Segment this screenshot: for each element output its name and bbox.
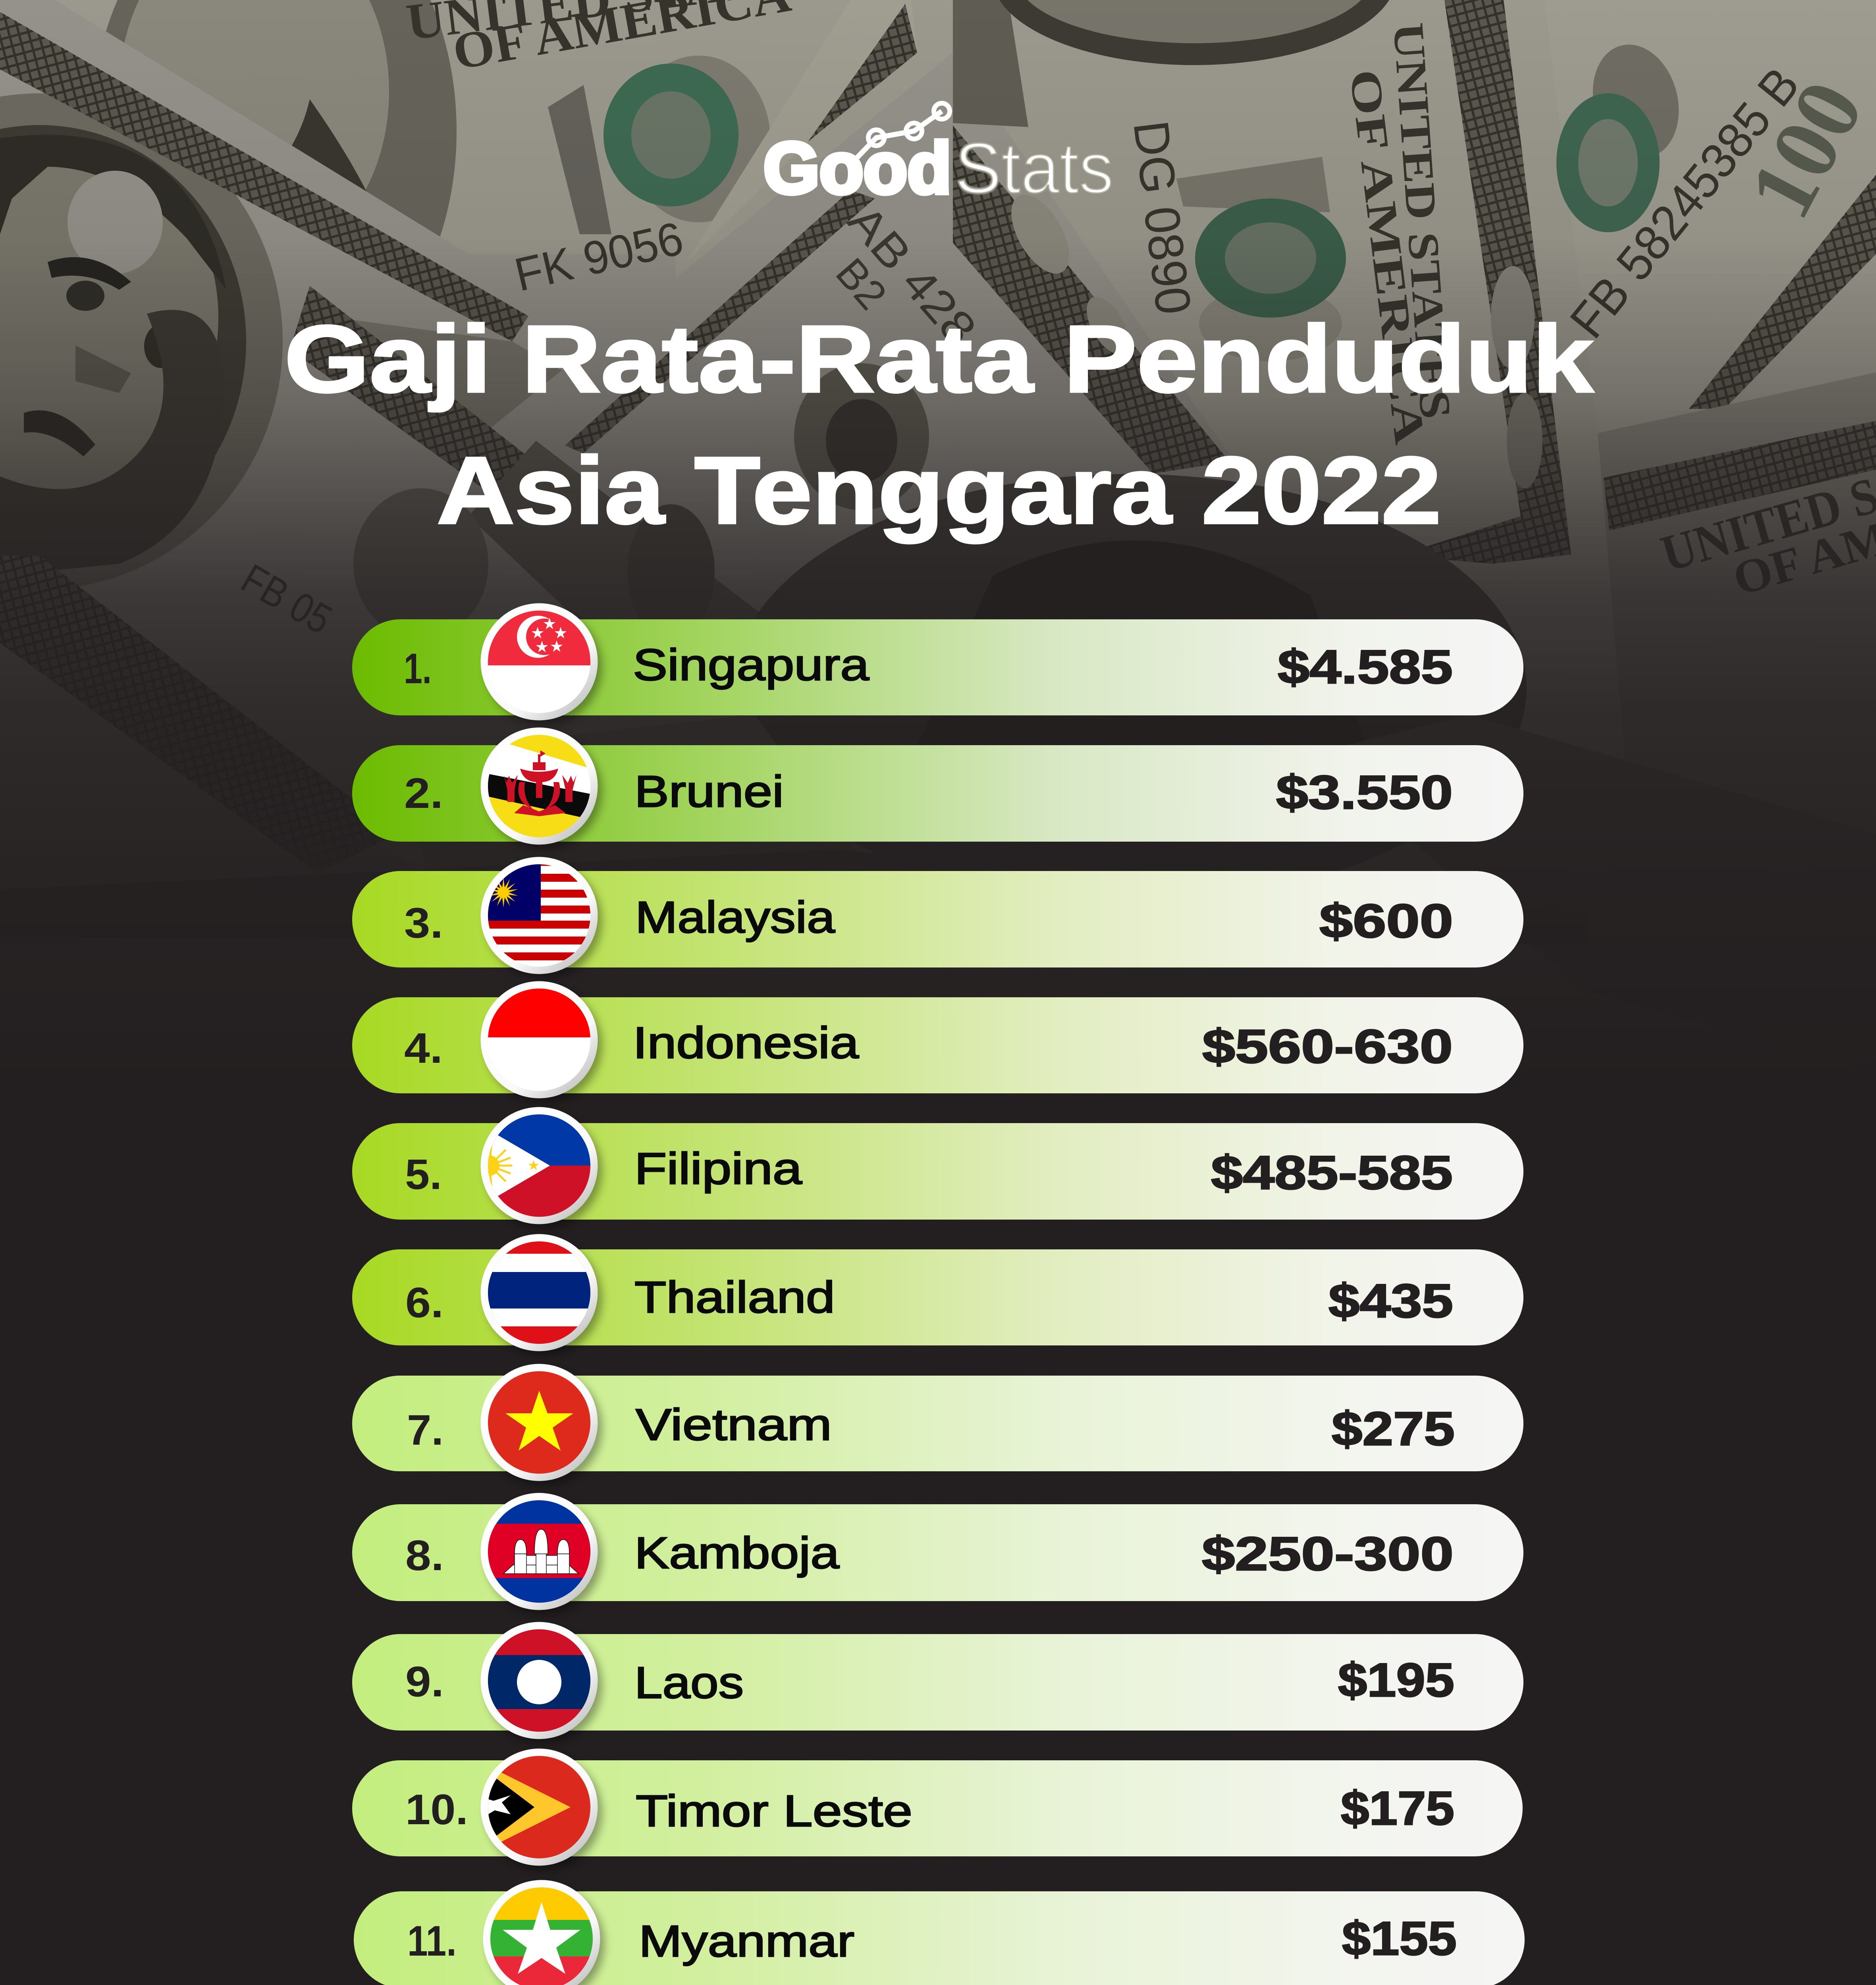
rank: 8. — [405, 1531, 444, 1579]
row 3: Malaysia — [352, 857, 1523, 979]
value: $600 — [1319, 894, 1453, 948]
bar — [354, 1891, 1525, 1985]
icon: Singapore flag — [480, 603, 602, 725]
serial DG 0890: DG 0890 — [1123, 118, 1201, 318]
row 10: Timor Leste — [352, 1748, 1523, 1871]
serial FB 58245385 B: FB 58245385 B — [1560, 57, 1810, 348]
icon: Brunei flag — [480, 727, 602, 850]
icon: Indonesia flag — [480, 981, 602, 1103]
rank: 2. — [404, 769, 443, 817]
bar — [352, 1634, 1523, 1731]
bar — [352, 1249, 1523, 1345]
row 7: Vietnam — [352, 1364, 1523, 1486]
title: Asia Tenggara 2022 — [437, 437, 1441, 543]
country: Vietnam — [636, 1400, 832, 1449]
background photo: dollar bills: FB 05 — [233, 555, 339, 643]
row 9: Laos — [352, 1622, 1523, 1744]
serial FK 9056: FK 9056 — [510, 212, 688, 301]
lower portrait shadow — [733, 474, 1527, 903]
bar — [352, 619, 1523, 715]
bar — [352, 871, 1523, 967]
bar — [352, 745, 1523, 842]
large figure 1 and seal — [548, 56, 770, 234]
value: $250-300 — [1202, 1527, 1454, 1580]
icon: Myanmar flag — [483, 1880, 604, 1985]
rank: 11. — [407, 1917, 457, 1965]
rank: 7. — [407, 1406, 443, 1454]
vertical United States lettering: OF AMERICA — [1340, 67, 1434, 447]
value: $3.550 — [1276, 766, 1453, 819]
country: Laos — [634, 1658, 744, 1707]
icon: Philippines flag — [468, 1107, 602, 1229]
row 2: Brunei — [352, 727, 1523, 850]
rank: 4. — [404, 1024, 443, 1072]
row 8: Kamboja — [352, 1493, 1523, 1615]
large portrait oval — [0, 93, 283, 590]
logo word Stats: Stats — [955, 127, 1114, 208]
title — [284, 306, 1594, 543]
country: Timor Leste — [636, 1786, 912, 1836]
value: $155 — [1342, 1912, 1457, 1965]
value: $4.585 — [1278, 640, 1453, 694]
country: Thailand — [634, 1272, 835, 1322]
row 6: Thailand — [352, 1234, 1523, 1356]
top-right centre bill paper — [1008, 0, 1612, 572]
rank: 5. — [405, 1150, 442, 1198]
figure 1 and treasury seal — [1176, 157, 1346, 361]
bar — [352, 1504, 1523, 1601]
lower-left seal — [353, 488, 488, 639]
title: Gaji Rata-Rata Penduduk — [284, 306, 1594, 412]
icon: Laos flag — [480, 1622, 602, 1744]
rank: 6. — [405, 1278, 443, 1326]
value: $195 — [1338, 1654, 1454, 1707]
country: Filipina — [634, 1144, 802, 1193]
bar — [352, 997, 1523, 1093]
country: Indonesia — [633, 1018, 859, 1068]
portrait at top of right centre bill — [992, 0, 1397, 65]
serial B2: B2 — [827, 249, 895, 318]
bar — [352, 1760, 1523, 1856]
vertical United States lettering — [1340, 21, 1460, 447]
bar — [352, 1376, 1523, 1471]
country: Brunei — [634, 767, 784, 816]
value: $485-585 — [1211, 1146, 1453, 1199]
bill corner band top — [686, 0, 917, 262]
treasury seal in centre bill — [794, 363, 929, 510]
lower-left bill band — [290, 286, 528, 492]
right band of centre bill — [953, 125, 1230, 474]
bar — [352, 1123, 1523, 1220]
logo: GoodStats — [764, 103, 1114, 208]
right diagonal band — [1689, 175, 1876, 409]
vertical United States lettering: UNITED STATES — [1384, 21, 1460, 420]
country: Myanmar — [639, 1916, 854, 1966]
icon: Cambodia flag — [480, 1493, 602, 1615]
logo word Good: Good — [764, 127, 951, 208]
right bill oval and seal — [1556, 35, 1691, 232]
country: Kamboja — [634, 1528, 840, 1578]
icon: Vietnam flag — [480, 1364, 602, 1486]
background photo: dollar bills — [0, 0, 1876, 1080]
serial AB 428: AB 428 — [838, 195, 986, 355]
country: Malaysia — [635, 892, 835, 942]
rank: 9. — [405, 1657, 444, 1706]
rank: 10. — [405, 1785, 468, 1833]
vertical engraved band — [1398, 0, 1571, 564]
icon: Timor Leste flag — [468, 1748, 602, 1871]
value: $275 — [1332, 1402, 1455, 1455]
icon: Malaysia flag — [480, 857, 602, 979]
rank: 1. — [404, 644, 432, 692]
centre bill paper — [480, 53, 1239, 675]
value: $560-630 — [1202, 1020, 1453, 1073]
row 4: Indonesia — [352, 981, 1523, 1103]
row 11: Myanmar — [354, 1880, 1525, 1985]
lower right bill — [1598, 372, 1876, 834]
lower left bill — [0, 596, 516, 973]
row 5: Filipina — [352, 1107, 1523, 1229]
logo chart line — [854, 103, 950, 161]
icon: Thailand flag — [480, 1234, 602, 1356]
portrait on upper-left bill — [91, 0, 457, 385]
value: $175 — [1341, 1782, 1454, 1835]
diagonal engraved band — [0, 12, 528, 341]
right bill paper — [1544, 0, 1876, 433]
left inner band of centre bill — [565, 190, 875, 453]
country: Singapura — [633, 640, 870, 690]
rank: 3. — [404, 899, 443, 947]
row 1: Singapura — [352, 603, 1523, 725]
value: $435 — [1328, 1274, 1453, 1328]
dark gradient overlay — [0, 0, 1876, 1080]
